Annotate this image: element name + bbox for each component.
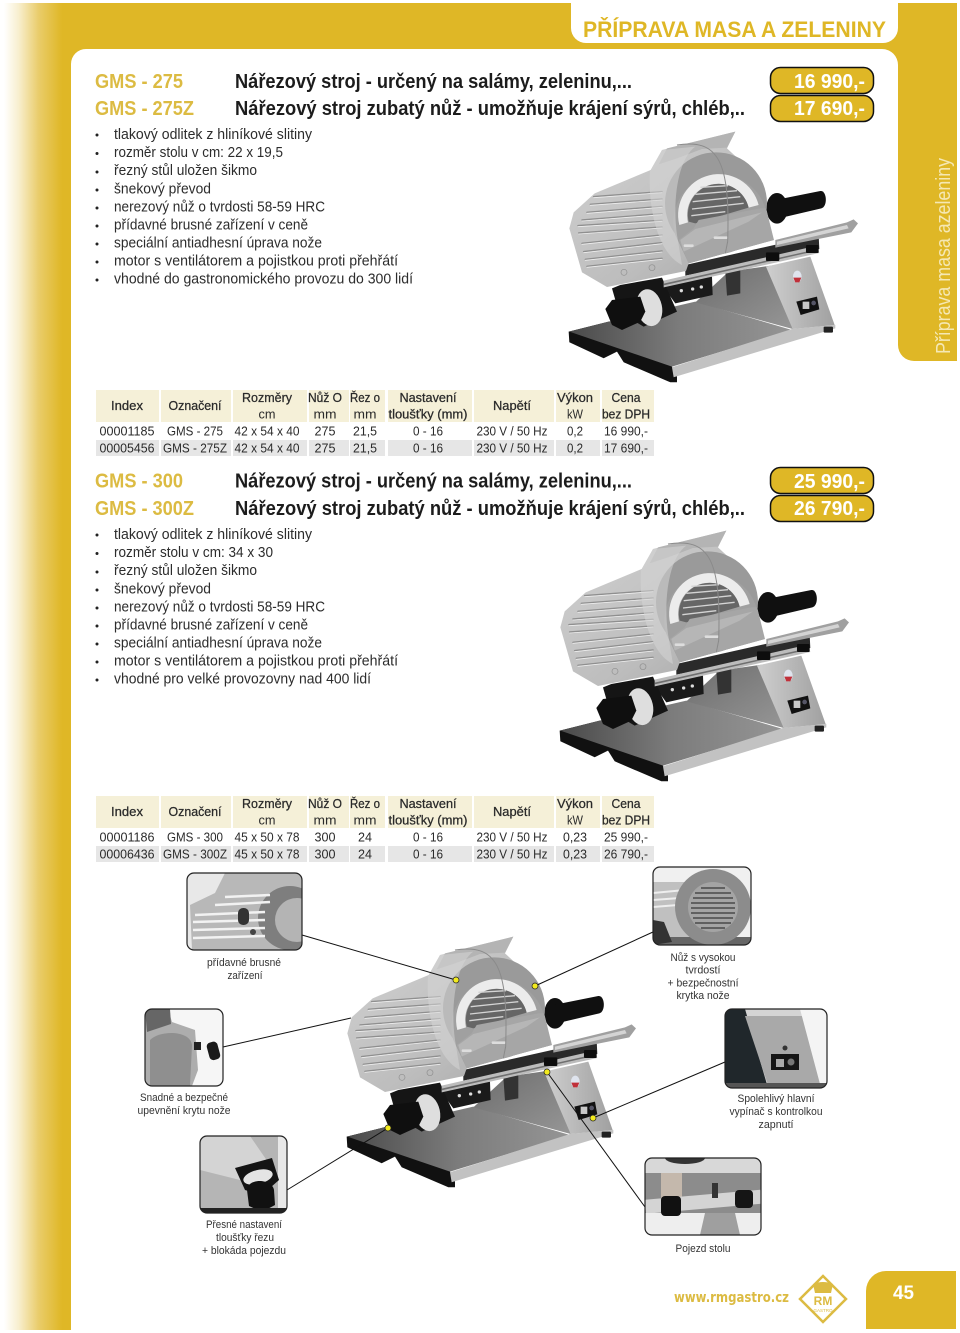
detail photo: table carriage [645, 1152, 762, 1235]
caption: blade hardness: + bezpečnostní [668, 978, 738, 990]
product 1 feature list: speciální antiadhesní úprava nože [114, 236, 322, 252]
product 2 headings: GMS - 300Z [95, 498, 194, 520]
section title tab: PŘÍPRAVA MASA A ZELENINY [583, 17, 886, 42]
product 2 specification table: 26 790,- [604, 848, 648, 862]
product 1 specification table: Řez o [350, 390, 380, 405]
product 1 specification table: Rozměry [242, 391, 293, 405]
product 1 feature list: rozměr stolu v cm: 22 x 19,5 [114, 145, 283, 161]
product 2 specification table: Cena [612, 797, 641, 811]
product 1 specification table: 230 V / 50 Hz [476, 424, 548, 438]
product 1 specification table: 230 V / 50 Hz [476, 442, 548, 456]
product 2 feature list: tlakový odlitek z hliníkové slitiny [114, 527, 313, 543]
product 2 specification table: Index [111, 805, 144, 819]
product 1 specification table: Nůž O [308, 391, 342, 405]
product 2 feature list: rozměr stolu v cm: 34 x 30 [114, 545, 273, 561]
product 2 specification table: GMS - 300Z [163, 848, 227, 862]
product 1 specification table: 00001185 [100, 424, 155, 438]
product 2 headings: Nářezový stroj zubatý nůž - umožňuje krájení sýrů, chléb,.. [235, 498, 745, 520]
product 2 specification table: 300 [314, 848, 336, 862]
caption: blade hardness [668, 952, 738, 1002]
product 1 specification table: GMS - 275Z [163, 442, 227, 456]
product 1 specification table: 0 - 16 [413, 442, 443, 456]
product 2 feature list: nerezový nůž o tvrdosti 58-59 HRC [114, 600, 325, 616]
caption: table carriage: Pojezd stolu [676, 1243, 730, 1255]
product 2 specification table: mm [314, 814, 336, 828]
product 2 feature list: šnekový převod [114, 582, 211, 598]
caption: guard fastening [138, 1092, 230, 1117]
product 2 prices [770, 468, 874, 522]
product 1 specification table: 21,5 [353, 442, 377, 456]
product 2 feature list [96, 527, 398, 688]
product 2 specification table: cm [258, 814, 276, 828]
product 2 feature list: motor s ventilátorem a pojistkou proti přehřátí [114, 654, 398, 670]
product 2 specification table: bez DPH [602, 814, 650, 828]
caption: main switch [730, 1093, 822, 1131]
product 1 specification table: 0,2 [567, 424, 583, 438]
product 1 specification table: 42 x 54 x 40 [234, 424, 300, 438]
logo: RM Gastro diamond [800, 1276, 846, 1322]
product 1 headings: GMS - 275 [95, 71, 183, 93]
product 2 machine illustration [560, 531, 849, 781]
product 2 specification table: 00001186 [100, 830, 155, 844]
product 1 specification table: bez DPH [602, 408, 650, 422]
logo: RM Gastro diamond: RM [814, 1294, 832, 1308]
product 1 specification table: Výkon [557, 391, 593, 405]
product 2 specification table: Rozměry [242, 797, 293, 811]
product 1 specification table: tloušťky (mm) [388, 408, 468, 422]
product 1 feature list: přídavné brusné zařízení v ceně [114, 218, 308, 234]
product 2 feature list: řezný stůl uložen šikmo [114, 563, 257, 579]
caption: guard fastening: Snadné a bezpečné [140, 1092, 228, 1104]
product 1 specification table: Cena [612, 391, 641, 405]
caption: main switch: zapnutí [758, 1119, 794, 1131]
detail photo: grinding device [186, 872, 303, 951]
product 1 specification table: 21,5 [353, 424, 377, 438]
product 1 feature list: nerezový nůž o tvrdosti 58-59 HRC [114, 200, 325, 216]
product 1 prices [770, 68, 874, 122]
product 2 feature list: vhodné pro velké provozovny nad 400 lidí [114, 672, 371, 688]
caption: guard fastening: upevnění krytu nože [138, 1105, 230, 1117]
product 2 specification table: 24 [358, 830, 372, 844]
product 2 specification table: Řez o [350, 796, 380, 811]
product 2 specification table: tloušťky (mm) [388, 814, 468, 828]
product 1 specification table: Index [111, 399, 144, 413]
product 1 specification table: mm [354, 408, 376, 422]
product 1 feature list: motor s ventilátorem a pojistkou proti přehřátí [114, 254, 398, 270]
product 1 specification table: GMS - 275 [167, 424, 223, 438]
product 2 specification table: 0,23 [563, 830, 587, 844]
product 1 specification table: Označení [168, 399, 222, 413]
product 2 prices: 25 990,- [794, 471, 865, 493]
side label: Příprava masa azeleniny [933, 158, 955, 354]
callout connector lines [223, 932, 725, 1207]
product 2 specification table: 230 V / 50 Hz [476, 848, 548, 862]
product 2 specification table: 45 x 50 x 78 [234, 848, 300, 862]
product 1 prices: 16 990,- [794, 71, 865, 93]
section title tab [571, 3, 898, 43]
product 2 specification table: kW [567, 814, 583, 828]
caption: thickness adjustment [202, 1219, 286, 1257]
product 1 headings: Nářezový stroj zubatý nůž - umožňuje krájení sýrů, chléb,.. [235, 98, 745, 120]
caption: thickness adjustment: Přesné nastavení [206, 1219, 282, 1231]
product 2 specification table: Napětí [493, 805, 532, 819]
product 1 headings: GMS - 275Z [95, 98, 194, 120]
logo: RM Gastro diamond: GASTRO [813, 1308, 833, 1313]
product 1 feature list: tlakový odlitek z hliníkové slitiny [114, 127, 313, 143]
product 1 prices: 17 690,- [794, 98, 865, 120]
product 2 specification table: mm [354, 814, 376, 828]
product 2 specification table: 0 - 16 [413, 848, 443, 862]
detail photo: thickness adjustment [200, 1136, 287, 1213]
product 1 specification table: 16 990,- [604, 424, 648, 438]
caption: thickness adjustment: tloušťky řezu [216, 1232, 274, 1244]
product 1 specification table: Napětí [493, 399, 532, 413]
product 1 specification table: 42 x 54 x 40 [234, 442, 300, 456]
product 2 headings: Nářezový stroj - určený na salámy, zeleninu,... [235, 470, 632, 492]
product 2 specification table: Nastavení [400, 797, 457, 811]
caption: grinding device [207, 957, 281, 982]
product 1 specification table: 275 [314, 424, 336, 438]
product 2 prices: 26 790,- [794, 498, 865, 520]
product 1 specification table [96, 390, 654, 456]
caption: thickness adjustment: + blokáda pojezdu [202, 1245, 286, 1257]
product 2 specification table: Nůž O [308, 797, 342, 811]
product 1 specification table: cm [258, 408, 276, 422]
product 2 specification table: 0,23 [563, 848, 587, 862]
product 2 specification table [96, 796, 654, 862]
website address: www.rmgastro.cz [674, 1290, 789, 1306]
product 1 specification table: 0 - 16 [413, 424, 443, 438]
product 2 feature list: speciální antiadhesní úprava nože [114, 636, 322, 652]
product 1 feature list: vhodné do gastronomického provozu do 300 lidí [114, 272, 413, 288]
product 2 specification table: 45 x 50 x 78 [234, 830, 300, 844]
central machine illustration [347, 937, 636, 1187]
detail photo: guard fastening [145, 1009, 223, 1086]
product 2 headings: GMS - 300 [95, 470, 183, 492]
product 1 specification table: 17 690,- [604, 442, 648, 456]
product 1 specification table: kW [567, 408, 583, 422]
product 1 feature list: šnekový převod [114, 182, 211, 198]
product 1 specification table: Nastavení [400, 391, 457, 405]
product 2 specification table: Výkon [557, 797, 593, 811]
caption: grinding device: zařízení [228, 970, 262, 982]
product 2 specification table: 25 990,- [604, 830, 648, 844]
product 1 specification table: mm [314, 408, 336, 422]
product 2 specification table: GMS - 300 [167, 830, 223, 844]
product 1 headings [95, 71, 745, 120]
product 2 specification table: 00006436 [100, 848, 155, 862]
caption: blade hardness: Nůž s vysokou [670, 952, 736, 964]
product 2 headings [95, 470, 745, 520]
product 1 feature list [96, 127, 413, 288]
page number tab [866, 1271, 956, 1329]
product 2 specification table: 0 - 16 [413, 830, 443, 844]
page number tab: 45 [893, 1283, 914, 1304]
detail photo: main switch [725, 1009, 827, 1088]
product 1 headings: Nářezový stroj - určený na salámy, zeleninu,... [235, 71, 632, 93]
product 2 specification table: Označení [168, 805, 222, 819]
detail photo: blade guard [653, 867, 751, 945]
caption: main switch: vypínač s kontrolkou [730, 1106, 822, 1118]
caption: main switch: Spolehlivý hlavní [738, 1093, 814, 1105]
product 1 specification table: 0,2 [567, 442, 583, 456]
product 2 specification table: 24 [358, 848, 372, 862]
product 1 machine illustration [569, 132, 858, 382]
product 1 specification table: 00005456 [100, 442, 155, 456]
product 2 specification table: 230 V / 50 Hz [476, 830, 548, 844]
caption: blade hardness: krytka nože [676, 990, 730, 1002]
product 2 specification table: 300 [314, 830, 336, 844]
callout markers [385, 977, 596, 1131]
product 1 feature list: řezný stůl uložen šikmo [114, 163, 257, 179]
caption: blade hardness: tvrdostí [686, 964, 720, 976]
caption: grinding device: přídavné brusné [207, 957, 281, 969]
product 2 feature list: přídavné brusné zařízení v ceně [114, 618, 308, 634]
product 1 specification table: 275 [314, 442, 336, 456]
